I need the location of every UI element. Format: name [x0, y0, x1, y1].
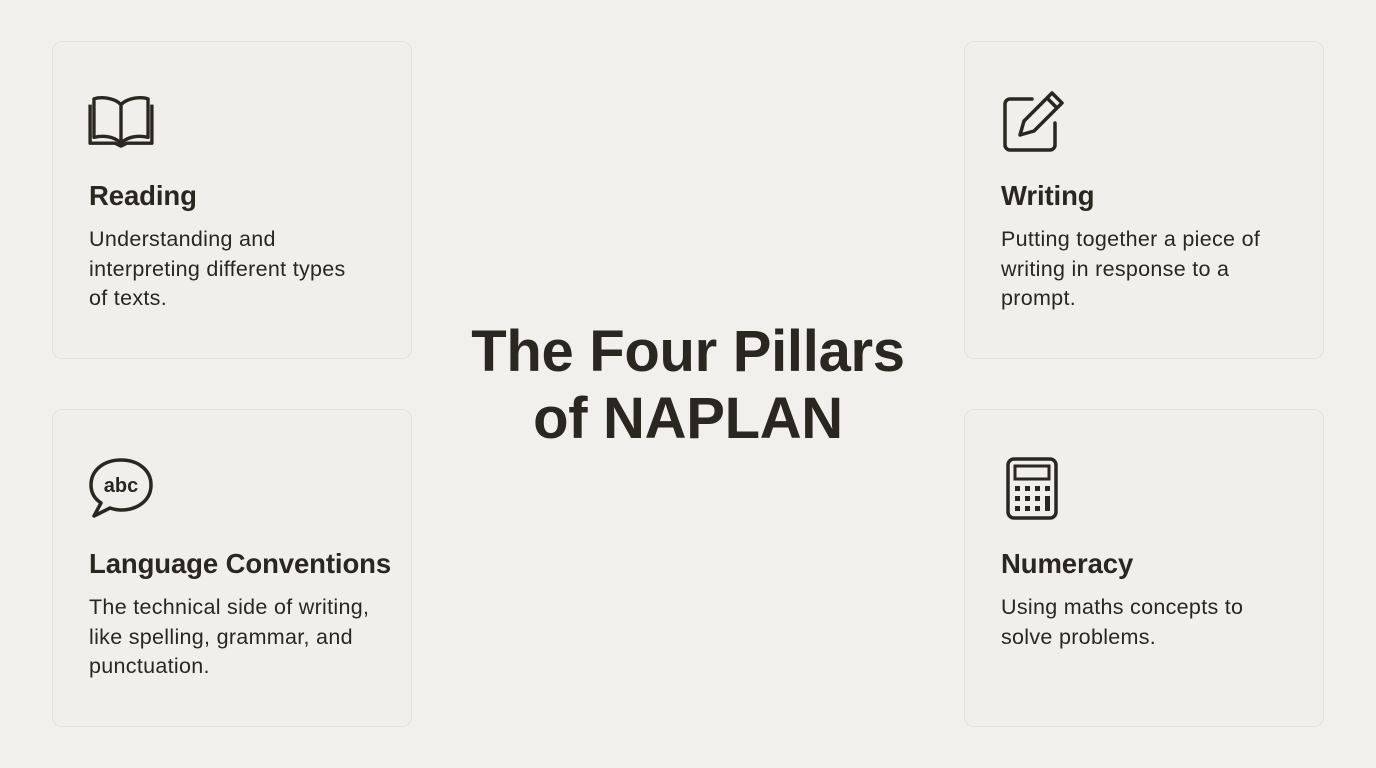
icon: speech bubble abc: abc: [104, 475, 138, 497]
icon: speech bubble abc: [89, 458, 153, 518]
text: reading desc: Understanding and interpreting different types of texts.: [89, 227, 346, 310]
icon: calculator: [1006, 457, 1058, 520]
heading: Reading: Reading: [89, 180, 197, 211]
icon: pencil on square: [1003, 91, 1064, 152]
title: [471, 319, 905, 451]
title: The Four Pillars: [471, 319, 905, 384]
card: numeracy: [964, 409, 1324, 727]
icon: open book: [88, 96, 154, 148]
heading: Numeracy: Numeracy: [1001, 548, 1133, 579]
text: language desc: The technical side of writing, like spelling, grammar, and punctuation.: [89, 595, 369, 678]
text: writing desc: Putting together a piece of writing in response to a prompt.: [1001, 227, 1260, 310]
text: numeracy desc: Using maths concepts to solve problems.: [1001, 595, 1243, 648]
title: of NAPLAN: [533, 386, 843, 451]
card: writing: [964, 41, 1324, 359]
heading: Language Conventions: Language Conventions: [89, 548, 391, 579]
card: language conventions: [52, 409, 412, 727]
card: reading: [52, 41, 412, 359]
heading: Writing: Writing: [1001, 180, 1094, 211]
